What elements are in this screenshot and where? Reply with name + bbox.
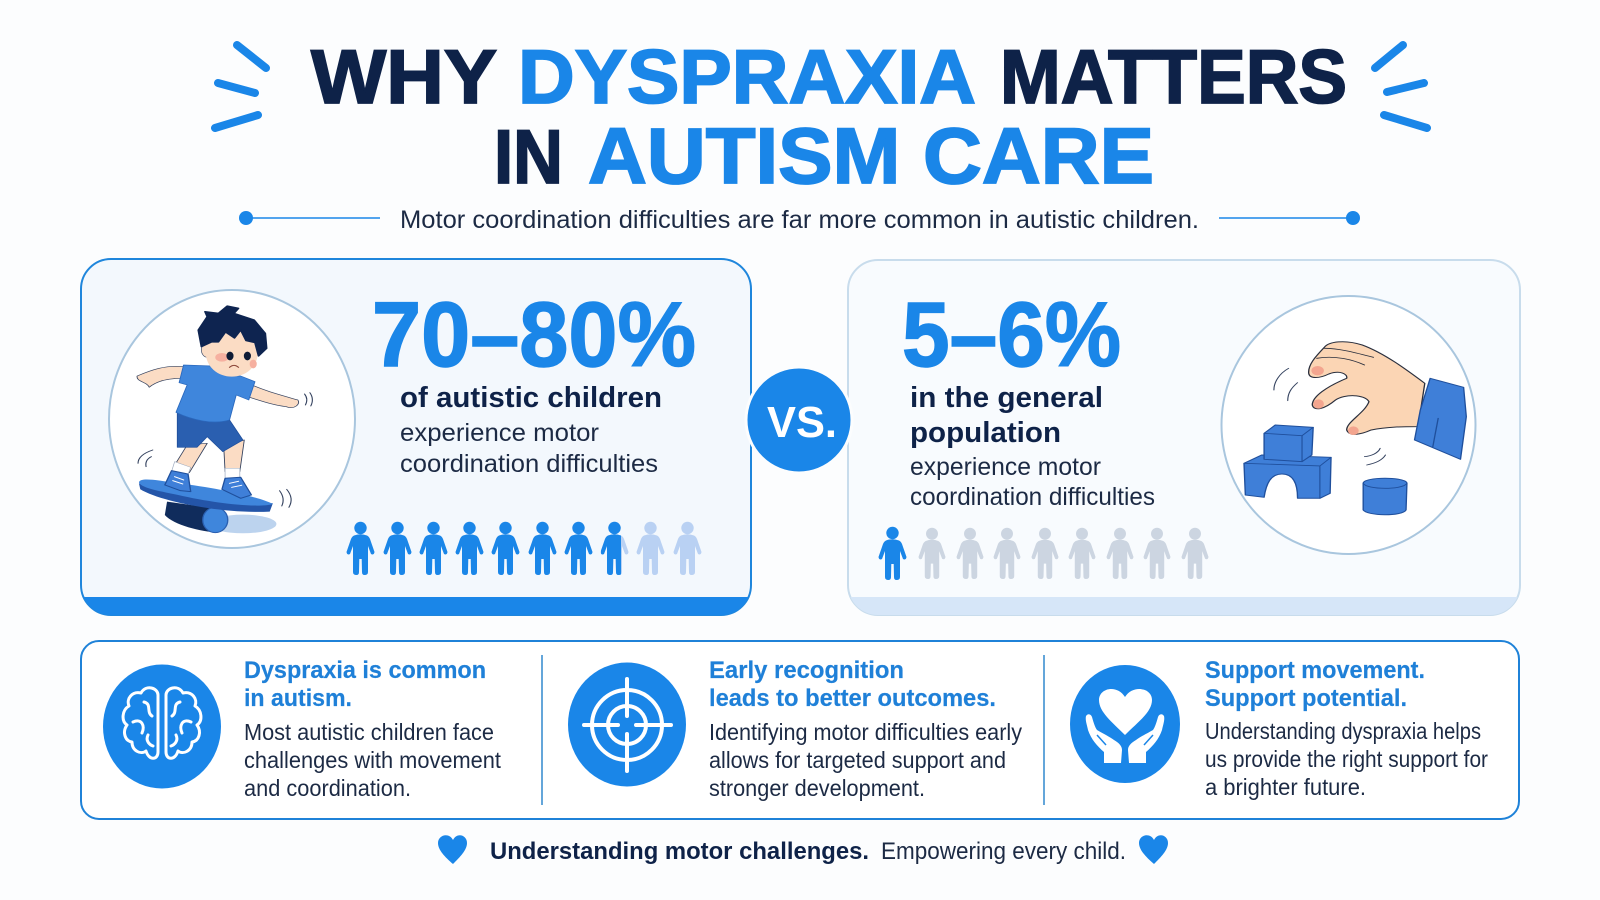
statistic description: [910, 453, 1155, 511]
statistic: 5–6%: 5–6%: [902, 284, 1121, 386]
icon: left heart: [438, 835, 467, 864]
panel: autistic children statistic: [81, 259, 751, 615]
subtitle: Motor coordination difficulties are far more common in autistic children.: [400, 206, 1199, 234]
panel: general population statistic: [848, 260, 1520, 615]
takeaway text: dyspraxia is common: and coordination.: [244, 775, 411, 801]
title: DYSPRAXIA: [518, 35, 976, 120]
takeaway text: dyspraxia is common: in autism.: [244, 685, 352, 712]
illustration circle: [109, 290, 355, 548]
takeaway text: early recognition: leads to better outcomes.: [709, 685, 996, 712]
statistic label: in the general: [910, 382, 1103, 414]
icon: brain: [103, 664, 221, 788]
takeaway text: dyspraxia is common: challenges with movement: [244, 747, 502, 773]
footer tagline: [438, 835, 1168, 865]
statistic label: of autistic children: [400, 382, 662, 414]
takeaway text: early recognition: allows for targeted support and: [709, 747, 1006, 773]
statistic description: coordination difficulties: [400, 450, 658, 478]
subtitle right connector: [1219, 211, 1360, 225]
title: IN: [494, 115, 563, 200]
takeaway text: early recognition: stronger development.: [709, 775, 925, 801]
divider: [1043, 655, 1045, 805]
divider: [541, 655, 543, 805]
takeaway text: early recognition: [709, 657, 1022, 801]
takeaway text: support movement: Support potential.: [1205, 685, 1407, 712]
takeaway text: support movement: Understanding dyspraxia helps: [1205, 718, 1481, 744]
takeaway text: support movement: [1205, 657, 1488, 800]
panel background: [848, 260, 1520, 615]
title: WHY: [311, 35, 497, 120]
tagline bold: Understanding motor challenges.: [490, 838, 869, 865]
takeaway text: dyspraxia is common: Dyspraxia is common: [244, 657, 486, 684]
takeaway text: support movement: a brighter future.: [1205, 774, 1366, 800]
takeaway panel frame: [81, 641, 1519, 819]
illustration: hand reaching for blocks: [1244, 342, 1466, 515]
panel: key takeaways: [81, 641, 1519, 819]
takeaway text: support movement: Support movement.: [1205, 657, 1425, 684]
icon: right heart: [1139, 835, 1168, 864]
tagline regular: Empowering every child.: [881, 838, 1126, 865]
statistic description: [400, 419, 658, 478]
takeaway text: dyspraxia is common: Most autistic children face: [244, 719, 494, 745]
panel accent bar: [850, 597, 1518, 615]
statistic description: experience motor: [910, 453, 1101, 481]
statistic label: [910, 382, 1103, 449]
panel accent bar: [84, 597, 748, 615]
title: [311, 35, 1347, 200]
icon: left title rays: [215, 45, 266, 128]
vs badge: VS.: [767, 398, 837, 447]
statistic description: experience motor: [400, 419, 599, 447]
panel background: [81, 259, 751, 615]
vs badge: [746, 367, 852, 473]
takeaway text: early recognition: Early recognition: [709, 657, 904, 684]
statistic: 70–80%: 70–80%: [372, 284, 696, 386]
icon: target: [568, 662, 686, 786]
pictogram: 1 of 9 people: [878, 527, 1208, 580]
title: AUTISM CARE: [588, 111, 1154, 200]
icon: right title rays: [1375, 45, 1427, 128]
illustration circle: [1222, 296, 1476, 554]
illustration: boy balancing on a board: [137, 306, 312, 533]
statistic label: population: [910, 417, 1061, 449]
statistic description: coordination difficulties: [910, 483, 1155, 511]
takeaway text: dyspraxia is common: [244, 657, 502, 801]
pictogram: 8 of 10 people: [346, 522, 702, 575]
takeaway text: support movement: us provide the right support for: [1205, 746, 1488, 772]
icon: heart in hands: [1070, 665, 1180, 783]
title: MATTERS: [1000, 35, 1347, 120]
subtitle left connector: [239, 211, 380, 225]
takeaway text: early recognition: Identifying motor difficulties early: [709, 719, 1022, 745]
